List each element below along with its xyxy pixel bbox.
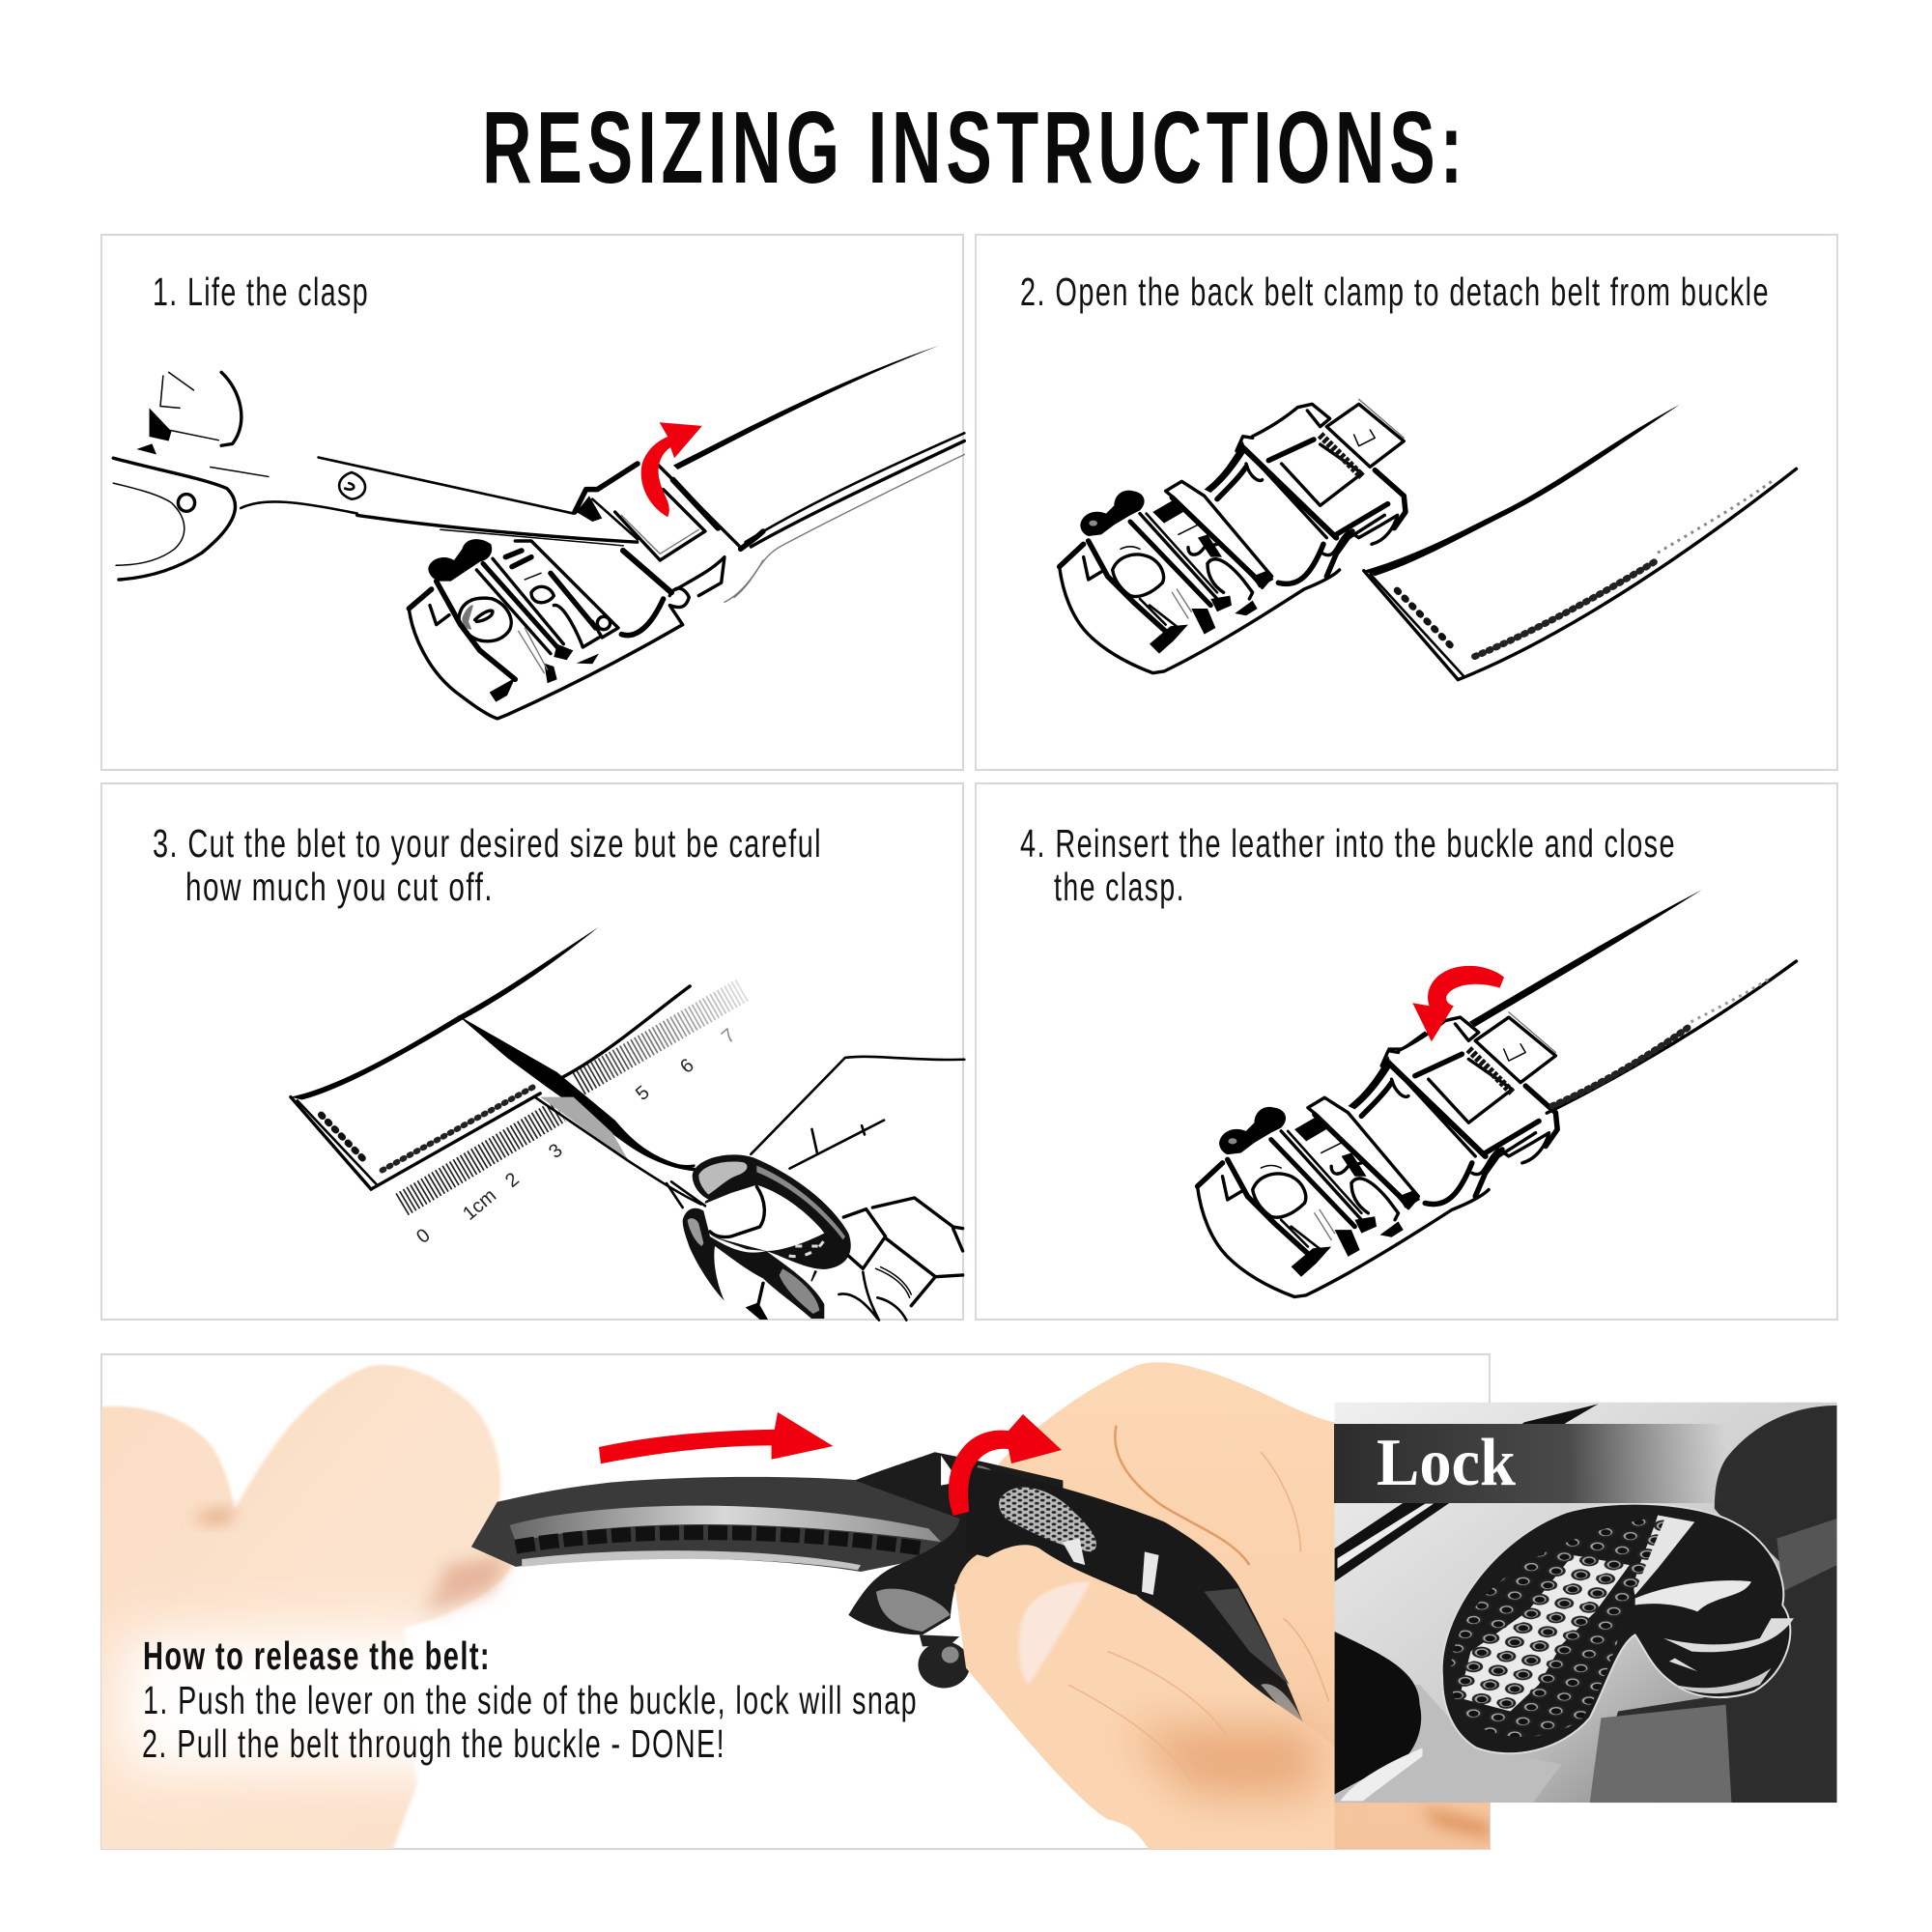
panel: step 2 open the clamp: [976, 235, 1837, 770]
panel: step 1 lift the clasp: [101, 235, 964, 770]
panel: step 4 reinsert the leather: [976, 783, 1837, 1320]
release instructions text: 2. Pull the belt through the buckle - DONE!: [142, 1721, 725, 1766]
step 4 belt and arrow: [1389, 890, 1797, 1113]
step 3 caption: 3. Cut the blet to your desired size but be careful: [153, 821, 822, 866]
panel: step 3 cut the belt: [101, 783, 964, 1321]
step 1 caption: 1. Life the clasp: [153, 270, 369, 314]
release instructions text: 1. Push the lever on the side of the buckle, lock will snap: [143, 1678, 918, 1722]
arrow: lever direction: [949, 1414, 1062, 1516]
photo: belt strap: [471, 1452, 1063, 1688]
arrow: push direction: [599, 1412, 833, 1463]
step 1 scissors and belt: [113, 346, 964, 597]
step 4 caption line two: the clasp.: [1054, 865, 1185, 909]
photo: left hand: [101, 1364, 516, 1849]
lock knob body: [1442, 1504, 1790, 1753]
release instructions text: How to release the belt:: [143, 1634, 491, 1678]
photo: hands and buckle: [97, 1362, 1491, 1851]
step 4 caption: 4. Reinsert the leather into the buckle and close: [1020, 821, 1676, 866]
photo: right hand: [954, 1362, 1491, 1851]
arrow: lift: [641, 422, 702, 517]
ruler numerals: 0: [412, 1225, 435, 1248]
step 4 buckle: [1198, 1012, 1557, 1297]
step 2 buckle: [1060, 399, 1406, 673]
ruler numerals: 3: [545, 1140, 567, 1163]
ruler numerals: 2: [501, 1169, 524, 1192]
release instructions text: [142, 1634, 918, 1766]
panel: how to release the belt: [97, 1354, 1491, 1851]
step 1 buckle: [409, 464, 763, 719]
ruler numerals: [412, 1025, 740, 1248]
ruler ticks: [402, 989, 744, 1248]
lock label: Lock: [1377, 1426, 1516, 1500]
title: RESIZING INSTRUCTIONS:: [482, 91, 1467, 205]
step 3 hand and scissor handles: [667, 1154, 963, 1321]
photo: buckle: [848, 1452, 1063, 1634]
ruler numerals: 1cm: [459, 1185, 500, 1225]
step 3 caption line two: how much you cut off.: [185, 865, 494, 909]
inset: lock close-up: [1334, 1403, 1837, 1803]
ruler numerals: 6: [676, 1055, 698, 1078]
ruler numerals: 7: [718, 1025, 740, 1048]
lock label band: [1334, 1424, 1725, 1503]
photo: thumb: [954, 1545, 1335, 1851]
arrow: close: [1412, 966, 1504, 1041]
ruler numerals: 5: [632, 1082, 654, 1105]
step 3 belt and scissors: [291, 927, 964, 1205]
step 2 loose belt: [1364, 405, 1797, 680]
